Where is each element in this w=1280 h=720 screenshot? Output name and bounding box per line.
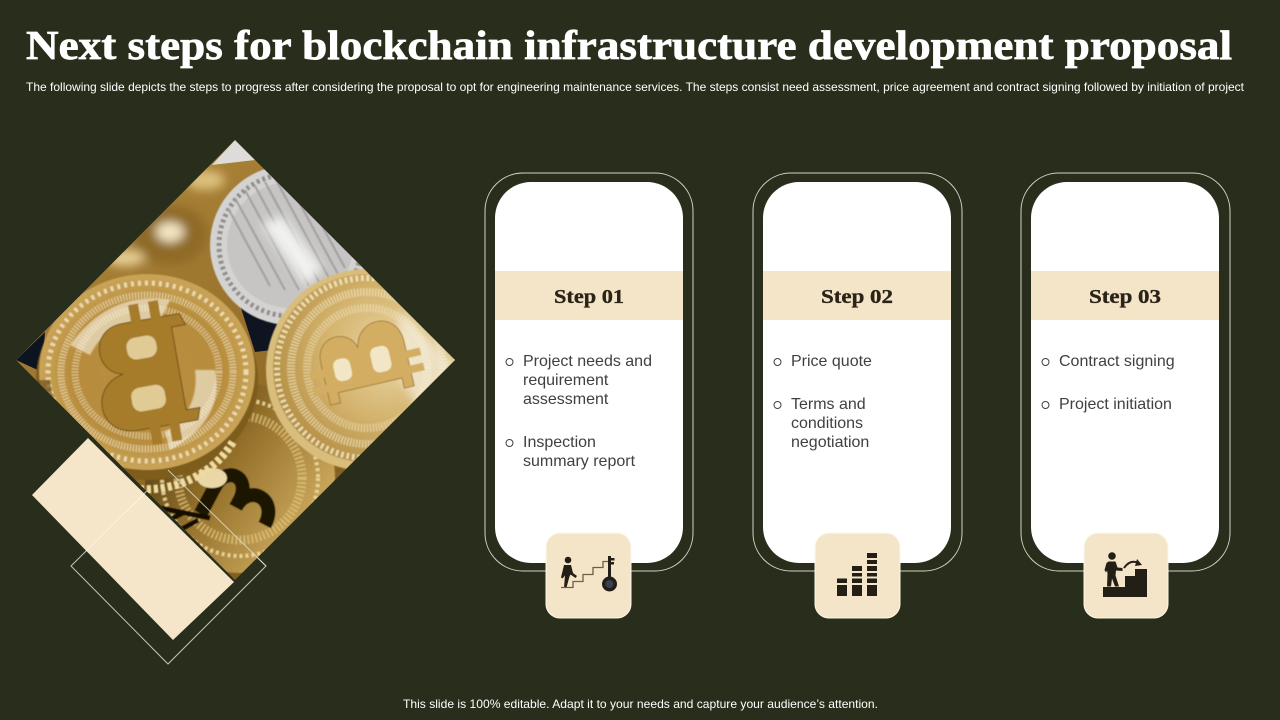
heading band 2: [763, 271, 951, 320]
icon: climbing stairs to a key: [546, 533, 631, 618]
heading band 1: Step 01: [554, 286, 624, 308]
mirrored bitcoin symbol left: [98, 300, 201, 445]
bullet list 1: summary report: [523, 453, 636, 470]
card outline 1: [485, 173, 693, 571]
icon: person climbing stairs with arrow: [1084, 533, 1168, 618]
panel: step 02: [753, 173, 962, 618]
card body 2: [763, 182, 951, 563]
bullet list 1: requirement: [523, 372, 609, 389]
bitcoin coin right: [266, 268, 370, 470]
bullet list 2: Price quote: [791, 353, 872, 370]
card body 3: [1031, 182, 1219, 563]
subtitle: The following slide depicts the steps to progress after considering the proposal to opt for engineering maintenance services. The steps consist need assessment, price agreement and contract signing followed by initiation of project: [26, 80, 1245, 94]
card outline 3: [1021, 173, 1230, 571]
heading band 3: [1031, 271, 1219, 320]
heading band 1: [495, 271, 683, 320]
lower dark coin: [145, 383, 335, 573]
panel: step 01: [485, 173, 693, 618]
bullet list 1: Inspection: [523, 434, 596, 451]
bullet list 1: [506, 353, 652, 470]
decorative diamond outline: [71, 470, 266, 664]
heading band 2: Step 02: [821, 286, 893, 308]
title: Next steps for blockchain infrastructure development proposal: [26, 22, 1232, 68]
outline over the photo: [168, 470, 266, 566]
heading band 3: Step 03: [1089, 286, 1161, 308]
silver coin: [210, 165, 370, 325]
card body 1: [495, 182, 683, 563]
bullet list 1: Project needs and: [523, 353, 652, 370]
bullet list 2: negotiation: [791, 434, 869, 451]
bullet list 2: [774, 353, 872, 451]
footer note: This slide is 100% editable. Adapt it to your needs and capture your audience’s attention.: [403, 697, 878, 711]
bullet list 2: conditions: [791, 415, 863, 432]
panel: step 03: [1021, 173, 1230, 618]
bitcoin coin left: [36, 344, 258, 480]
bullet list 3: [1042, 353, 1175, 413]
bullet list 3: Project initiation: [1059, 396, 1172, 413]
bullet list 1: assessment: [523, 391, 609, 408]
card outline 2: [753, 173, 962, 571]
photo: bitcoin coins in a diamond crop: [16, 140, 468, 580]
bullet list 2: Terms and: [791, 396, 866, 413]
bullet list 3: Contract signing: [1059, 353, 1175, 370]
rotated bitcoin symbol right: [309, 320, 426, 406]
decorative cream block: [32, 438, 234, 640]
blurred coin behind, upper left: [105, 170, 225, 266]
highlights on the left coin: [70, 298, 217, 450]
icon: stacked coin bars: [815, 533, 900, 618]
